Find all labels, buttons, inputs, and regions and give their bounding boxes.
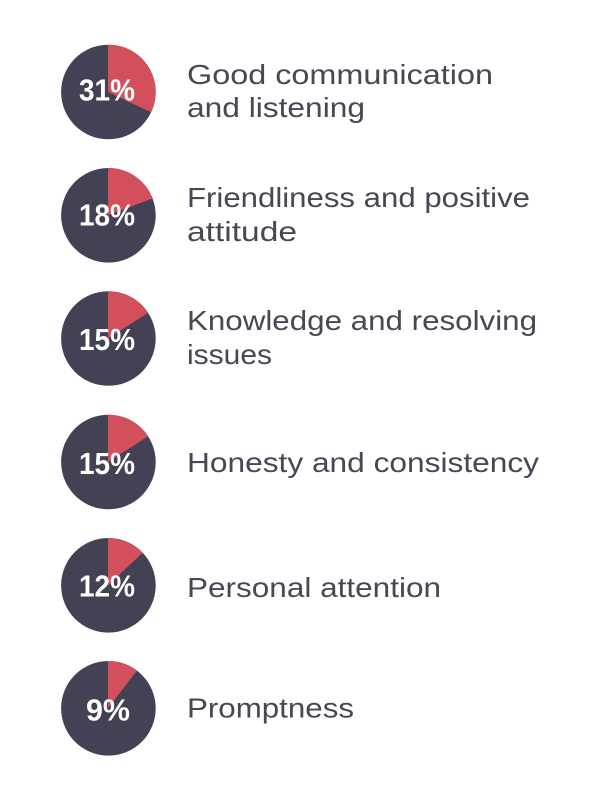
pie: 15% bbox=[61, 415, 156, 509]
pie: 31%: 31% bbox=[79, 72, 135, 108]
pie: 31% bbox=[61, 45, 156, 139]
pie: 18%: 18% bbox=[79, 198, 135, 232]
label: friendliness and positive attitude: attitude bbox=[187, 216, 297, 247]
label: honesty and consistency: Honesty and consistency bbox=[187, 447, 539, 478]
label: knowledge and resolving issues: issues bbox=[187, 339, 272, 370]
label: knowledge and resolving issues: Knowledge and resolving bbox=[187, 305, 537, 336]
pie: 9%: 9% bbox=[86, 692, 130, 728]
label: good communication and listening bbox=[187, 59, 493, 123]
pie: 15%: 15% bbox=[79, 446, 135, 481]
row: 15% knowledge and resolving issues bbox=[61, 291, 537, 386]
pie: 12% bbox=[61, 538, 156, 633]
label: promptness: Promptness bbox=[187, 692, 354, 724]
label: friendliness and positive attitude: Friendliness and positive bbox=[187, 182, 530, 213]
pie: 12%: 12% bbox=[79, 568, 135, 604]
label: good communication and listening: Good communication bbox=[187, 59, 493, 90]
row: 15% honesty and consistency bbox=[61, 415, 539, 509]
label: good communication and listening: and listening bbox=[187, 92, 365, 123]
label: friendliness and positive attitude bbox=[187, 182, 530, 247]
label: personal attention: Personal attention bbox=[187, 572, 441, 603]
row: 31% good communication and listening bbox=[61, 45, 493, 139]
row: 18% friendliness and positive attitude bbox=[61, 168, 530, 263]
pie: 15% bbox=[61, 291, 156, 386]
label: knowledge and resolving issues bbox=[187, 305, 537, 370]
pie: 9% bbox=[61, 661, 156, 756]
row: 9% promptness bbox=[61, 661, 354, 756]
pie: 15%: 15% bbox=[79, 322, 135, 357]
pie: 18% bbox=[61, 168, 156, 263]
row: 12% personal attention bbox=[61, 538, 441, 633]
